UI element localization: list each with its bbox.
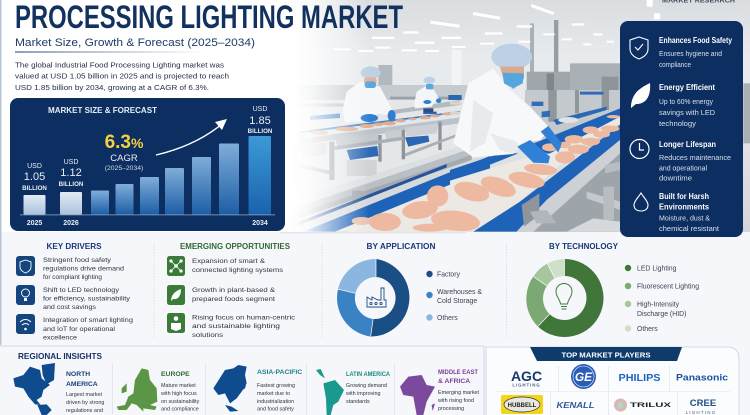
region: North America: AMERICA (66, 381, 98, 388)
intro text (15, 60, 229, 92)
region: Europe: Mature market (161, 383, 196, 389)
icon: bulb (16, 285, 35, 305)
logo: GE (571, 364, 596, 389)
CAGR callout: 6.3% (105, 132, 144, 153)
CAGR callout (105, 132, 144, 172)
icon: network (167, 256, 185, 276)
bar labels: 2025 (27, 220, 42, 227)
CAGR callout: CAGR (110, 153, 138, 164)
benefit: harsh environments (659, 192, 719, 233)
legend: Warehouses & (437, 289, 482, 296)
icon: clock (630, 140, 649, 158)
region: Asia-Pacific: market due to (257, 391, 290, 397)
hero photo: food processing line (270, 0, 750, 233)
logo: Hubbell (501, 395, 543, 414)
heading: BY TECHNOLOGY (549, 242, 619, 251)
driver text 3: and IoT for operational (43, 326, 116, 333)
region: Latin America: LATIN AMERICA (346, 371, 390, 378)
region: North America: NORTH (66, 371, 90, 378)
region: Latin America: standards (346, 399, 370, 405)
region: Europe: on sustainability (161, 399, 200, 405)
opportunity text 2: prepared foods segment (192, 296, 275, 303)
benefit: harsh environments: Moisture, dust & (659, 216, 710, 222)
logo: Cree (686, 398, 716, 415)
lower background and rear conveyor (280, 95, 467, 233)
heading: EMERGING OPPORTUNITIES (180, 242, 291, 251)
driver text 1: regulations drive demand (43, 266, 124, 272)
legend: Others (437, 315, 458, 322)
region: Asia-Pacific: and food safety (257, 406, 294, 412)
driver text 1: for compliant lighting (43, 274, 102, 281)
icon: leaf (631, 83, 650, 108)
benefit: food safety: Enhances Food Safety (659, 36, 733, 45)
region: Middle East and Africa: processing (438, 406, 464, 412)
region: Europe: and compliance (161, 406, 199, 412)
icon: shield (630, 37, 648, 59)
icon: person (167, 313, 185, 333)
logo: AGC: AGC (511, 368, 542, 384)
panel: market size and forecast (10, 98, 285, 231)
icon: Asia-Pacific map (213, 365, 247, 412)
logo: Cree: LIGHTING (686, 410, 716, 415)
background worker 2 (414, 77, 441, 112)
benefit: lifespan: and operational (659, 166, 707, 172)
driver text 2: and cost savings (43, 304, 97, 311)
bar labels: 2026 (63, 220, 79, 227)
driver text 3: excellence (43, 334, 77, 342)
region: Asia-Pacific: industrialization (257, 399, 294, 405)
icon: wifi (16, 314, 35, 334)
title: PROCESSING LIGHTING MARKET (15, 0, 403, 35)
benefit: lifespan: Reduces maintenance (659, 155, 731, 162)
driver text 1 (43, 257, 124, 281)
opportunity text 3: Rising focus on human-centric (192, 314, 296, 322)
benefit: harsh environments: Built for Harsh (659, 192, 709, 201)
region: Europe (117, 368, 200, 412)
benefit: energy (659, 83, 715, 128)
region: Asia-Pacific (213, 365, 302, 412)
region: North America: Largest market (66, 392, 102, 398)
icon: Latin America map (316, 369, 344, 415)
donut chart: application (337, 259, 409, 337)
legend (426, 271, 482, 322)
background worker 1 (343, 66, 396, 123)
icon: leaf (167, 285, 185, 305)
bar labels: BILLION (22, 185, 47, 192)
driver text 2: Shift to LED technology (43, 287, 120, 294)
intro text: USD 1.85 billion by 2034, growing at a CAGR of 6.3%. (15, 83, 209, 92)
benefit: food safety: compliance (659, 62, 691, 69)
panel: emerging opportunities (167, 242, 296, 339)
region: Asia-Pacific: ASIA-PACIFIC (257, 369, 302, 376)
opportunity text 2 (192, 287, 276, 303)
benefit: lifespan: Longer Lifespan (659, 140, 716, 149)
bar labels: 1.05 (24, 171, 45, 183)
panel heading: MARKET SIZE & FORECAST (48, 106, 157, 115)
logo: Trilux (614, 398, 672, 412)
bar labels: 1.85 (249, 115, 271, 127)
far machinery right side (450, 90, 622, 147)
bar labels (22, 106, 273, 227)
legend: Cold Storage (437, 298, 477, 305)
bar labels: USD (27, 163, 42, 170)
benefit: harsh environments: chemical resistant (659, 226, 719, 233)
heading: REGIONAL INSIGHTS (18, 352, 103, 361)
benefit: energy: savings with LED (659, 110, 715, 117)
logo: GE: GE (575, 370, 593, 384)
bar labels: BILLION (59, 181, 84, 188)
bar labels: BILLION (248, 128, 273, 135)
logo: Panasonic: Panasonic (676, 372, 728, 384)
arrow (156, 119, 227, 155)
opportunity text 3 (192, 314, 296, 339)
panel: by technology (526, 242, 699, 337)
icon: shield (16, 256, 35, 276)
opportunity text 1 (192, 258, 284, 274)
driver text 2 (43, 287, 131, 311)
opportunity text 1: Expansion of smart & (192, 258, 266, 265)
benefit: harsh environments: Environments (659, 202, 710, 212)
legend: Others (637, 326, 658, 333)
panel: regional insights (0, 346, 484, 415)
chicken fillets (352, 115, 620, 233)
opportunity text 3: solutions (192, 332, 224, 339)
left white title area (0, 0, 286, 232)
benefit: energy: technology (659, 121, 697, 128)
region: North America (13, 363, 104, 415)
logo: Kenall: KENALL (556, 400, 594, 410)
opportunity text 1: connected lighting systems (192, 267, 284, 274)
bar labels: USD (64, 159, 78, 166)
bar labels: USD (253, 106, 267, 113)
region: Middle East and Africa (400, 369, 480, 415)
heading: KEY DRIVERS (46, 242, 102, 251)
heading: BY APPLICATION (366, 242, 436, 251)
icon: water drop (634, 193, 648, 211)
icon: North America map (13, 363, 55, 415)
legend: Fluorescent Lighting (637, 284, 699, 290)
CAGR callout: (2025–2034) (105, 165, 143, 172)
panel: top market players (486, 347, 739, 415)
panel: by application (337, 242, 482, 337)
legend: LED Lighting (637, 266, 677, 272)
region: North America: driven by strong (66, 400, 104, 406)
donut chart: technology (526, 259, 604, 337)
region: Latin America: Growing demand (346, 383, 387, 389)
intro text: valued at USD 1.05 billion in 2025 and is projected to reach (15, 72, 229, 80)
banner: TOP MARKET PLAYERS (562, 350, 650, 360)
benefit: energy: Energy Efficient (659, 83, 715, 92)
region: Middle East and Africa: with rising food (437, 398, 474, 404)
region: Middle East and Africa: MIDDLE EAST (438, 369, 479, 376)
benefit: lifespan (659, 140, 731, 182)
logo: AGC: LIGHTING (512, 382, 541, 388)
region: North America: regulations and (66, 408, 103, 414)
benefit: food safety (659, 36, 733, 69)
panel: benefits (620, 21, 743, 237)
benefit: energy: Up to 60% energy (659, 99, 713, 106)
opportunity text 3: and sustainable lighting (192, 323, 280, 330)
legend (625, 265, 699, 333)
benefit: food safety: Ensures hygiene and (659, 51, 722, 58)
banner (530, 347, 682, 361)
region: Latin America: with improving (345, 391, 380, 397)
region: Asia-Pacific: Fastest growing (257, 383, 295, 389)
logo: Philips: PHILIPS (618, 372, 660, 384)
opportunity text 2: Growth in plant-based & (192, 287, 276, 294)
legend: Discharge (HID) (637, 311, 686, 318)
bar labels: 2034 (252, 220, 268, 227)
panel: key drivers (16, 242, 133, 342)
logo: Hubbell: HUBBELL (508, 403, 537, 409)
bar labels: 1.12 (60, 167, 82, 179)
subtitle: Market Size, Growth & Forecast (2025–2034) (15, 37, 255, 49)
driver text 3: Integration of smart lighting (43, 317, 133, 324)
main worker (453, 44, 562, 163)
driver text 3 (43, 317, 133, 342)
front steel rail and main belt (290, 145, 490, 232)
logo: Trilux: TRILUX (630, 402, 672, 409)
benefit: lifespan: downtime (659, 176, 692, 182)
icon: light bulb (556, 284, 572, 309)
icon: Africa map (400, 375, 435, 415)
icon: Europe map (117, 368, 157, 412)
region: Latin America (316, 369, 390, 415)
intro text: The global Industrial Food Processing Lighting market was (15, 60, 224, 70)
driver text 2: for efficiency, sustainability (43, 296, 131, 302)
driver text 1: Stringent food safety (43, 257, 112, 264)
region: Europe: with high focus (160, 391, 197, 397)
icon: factory (367, 288, 386, 307)
region: Europe: EUROPE (161, 371, 190, 378)
legend: Factory (437, 272, 461, 278)
region: Middle East and Africa: & AFRICA (438, 378, 470, 385)
bar chart (20, 136, 275, 215)
logo: Cree: CREE (690, 398, 716, 409)
region: Middle East and Africa: Emerging market (438, 390, 480, 396)
legend: High-Intensity (637, 302, 680, 308)
